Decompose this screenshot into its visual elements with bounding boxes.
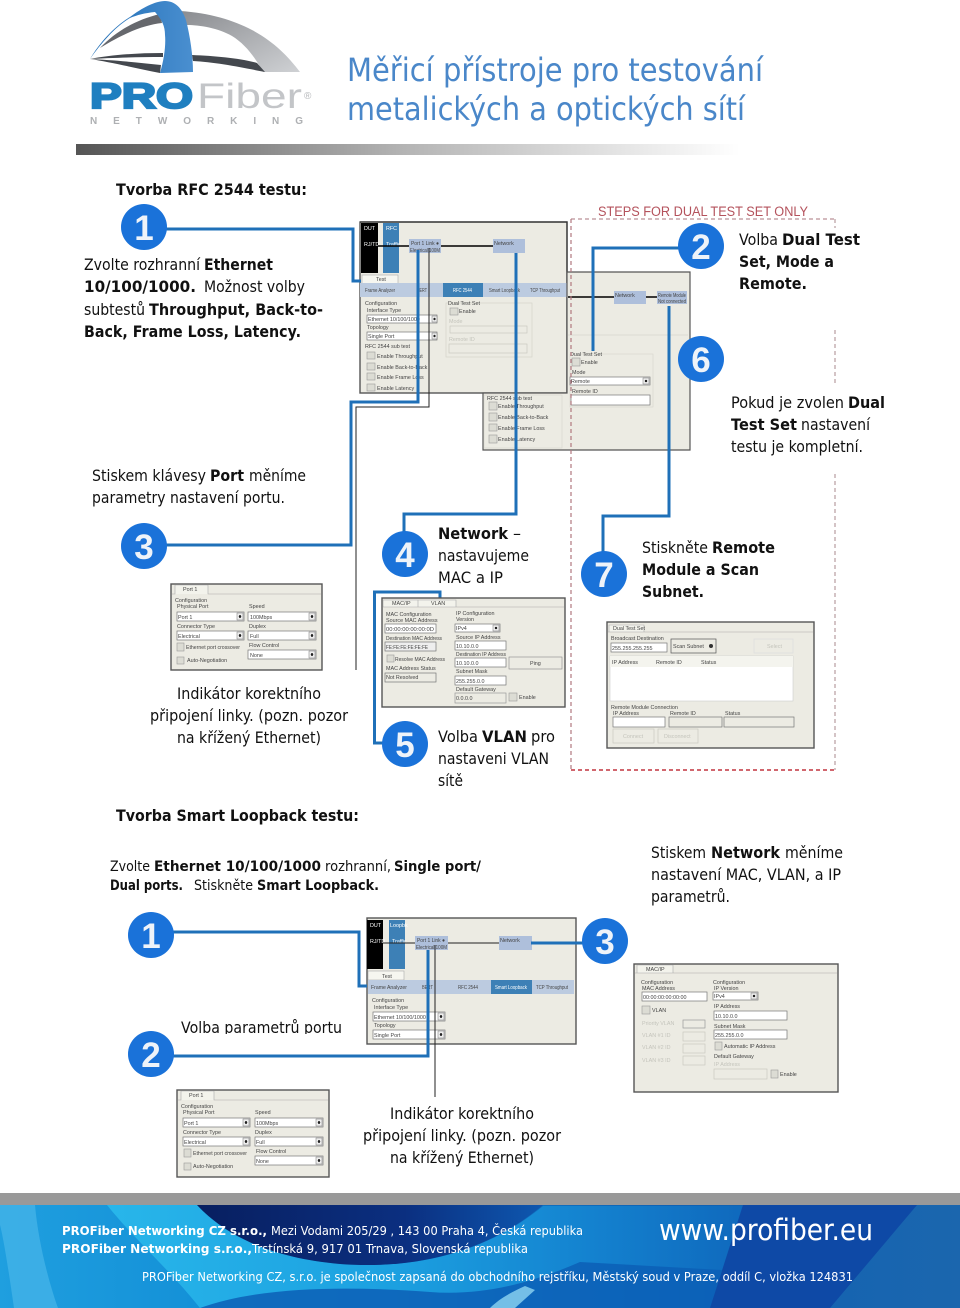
screenshot: dual test set window: Enable <box>581 360 598 366</box>
text: smart loopback instructions <box>110 859 482 894</box>
connector: smart loopback port indicator <box>434 945 436 1097</box>
screenshot: smart loopback window: Topology <box>374 1023 396 1029</box>
text: step 6 note <box>731 393 885 456</box>
screenshot: RFC 2544 main window: Enable Latency <box>377 386 414 392</box>
screenshot: dual test set window: Mode <box>572 370 586 376</box>
connector: smart loopback step 1 <box>172 932 367 986</box>
badge: 3 <box>121 523 167 569</box>
badge: 6 <box>678 336 724 382</box>
screenshot: smart loopback window: Traffic <box>392 939 407 945</box>
logo: PROFiber Networking <box>90 1 312 127</box>
screenshot: RFC 2544 main window: RFC <box>386 226 397 232</box>
screenshot: port settings (smart loopback): Port 1 <box>184 1121 198 1127</box>
screenshot: MAC/IP settings <box>382 598 565 707</box>
connector: step 4 <box>404 253 516 534</box>
screenshot: MAC/IP settings: VLAN <box>431 601 445 607</box>
connector: smart loopback step 2 <box>172 950 428 1056</box>
text: network key: nastavení MAC, VLAN, a IP <box>651 865 841 884</box>
text: step 1 instructions: subtestů <box>84 300 145 319</box>
screenshot: MAC/IP settings: Default Gateway <box>456 687 496 693</box>
screenshot: remote module scan <box>607 622 814 748</box>
text: step 2 instructions: Set, Mode a <box>739 252 834 271</box>
text: network key: parametrů. <box>651 887 730 906</box>
screenshot: network settings (smart loopback): IP Version <box>714 986 738 992</box>
screenshot: remote module scan: Status <box>725 711 741 717</box>
text: step 7 instructions: Subnet. <box>642 582 704 601</box>
screenshot: smart loopback window: RJ/TD <box>370 939 385 945</box>
badge: 5 <box>382 721 428 767</box>
text: step 2 instructions <box>739 230 860 293</box>
screenshot: port settings (smart loopback): Ethernet port crossover <box>193 1151 247 1157</box>
screenshot: dual test set window: Enable Throughput <box>498 404 544 410</box>
screenshot: MAC/IP settings: 0.0.0.0 <box>456 696 472 702</box>
text: port indicator note <box>150 684 348 747</box>
text: step 7 instructions: Module a Scan <box>642 560 759 579</box>
text: network step 4: MAC a IP <box>438 568 503 587</box>
screenshot: network settings (smart loopback): IP Address <box>714 1004 740 1010</box>
screenshot: RFC 2544 main window: Enable Back-to-Back <box>377 365 428 371</box>
screenshot: MAC/IP settings: Destination MAC Address <box>386 636 442 642</box>
text: step 6 note: Dual <box>848 393 885 412</box>
screenshot: RFC 2544 main window: Ethernet 10/100/1000 <box>368 317 420 323</box>
screenshot: RFC 2544 main window: Test <box>376 277 386 283</box>
footer: company addresses: PROFiber Networking CZ s.r.o., <box>62 1223 267 1238</box>
screenshot: smart loopback window <box>367 918 576 1044</box>
screenshot: port settings (RFC 2544): Configuration <box>175 598 207 604</box>
badge: loopback 3 <box>582 918 628 964</box>
connector: step 3 <box>165 250 418 545</box>
screenshot: MAC/IP settings: MAC/IP <box>392 601 411 607</box>
screenshot: smart loopback window: Interface Type <box>374 1005 408 1011</box>
text: step 1 instructions: Možnost volby <box>204 277 305 296</box>
screenshot: remote module scan: Select <box>767 644 782 650</box>
badge: 4: 4 <box>395 536 415 575</box>
screenshot: dual test set window: Remote ID <box>572 389 598 395</box>
screenshot: MAC/IP settings: 00:00:00:00:00:0D <box>386 627 434 633</box>
screenshot: dual test set window <box>483 272 690 450</box>
text: network key <box>651 843 843 906</box>
text: smart loopback port indicator note: na křížený Ethernet) <box>390 1148 534 1167</box>
text: smart loopback instructions: Ethernet 10/100/1000 <box>154 859 321 875</box>
text: network step 4 <box>438 524 529 587</box>
screenshot: MAC/IP settings: Ping <box>530 661 541 667</box>
screenshot: smart loopback window: Configuration <box>372 998 404 1004</box>
screenshot: remote module scan: Remote ID <box>656 660 682 666</box>
connector: step 2 <box>593 248 680 351</box>
screenshot: RFC 2544 main window: Enable Frame Loss <box>377 375 424 381</box>
screenshot: RFC 2544 main window: Traffic <box>386 242 401 248</box>
screenshot: port settings (RFC 2544): Duplex <box>249 624 266 630</box>
screenshot: RFC 2544 main window: Interface Type <box>367 308 401 314</box>
screenshot: network settings (smart loopback): Enable <box>780 1072 797 1078</box>
connector: step 1 <box>165 229 361 281</box>
screenshot: port settings (RFC 2544): Electrical <box>178 634 200 640</box>
screenshot: RFC 2544 main window: Dual Test Set <box>448 301 480 307</box>
screenshot: smart loopback window: RFC 2544 <box>458 985 478 991</box>
screenshot: port settings (smart loopback): Electrical <box>184 1140 206 1146</box>
screenshot: port settings (smart loopback): Flow Control <box>256 1149 286 1155</box>
badge: loopback 3: 3 <box>595 923 615 962</box>
screenshot: MAC/IP settings: Source IP Address <box>456 635 501 641</box>
connector: step 5 <box>374 592 440 743</box>
screenshot: MAC/IP settings: IP Configuration <box>456 611 495 617</box>
title <box>347 51 764 128</box>
screenshot: smart loopback window: BERT <box>422 985 434 991</box>
badge: 6: 6 <box>691 341 711 380</box>
screenshot: RFC 2544 main window <box>360 222 567 393</box>
text: step 1 instructions: Zvolte rozhranní <box>84 255 200 274</box>
logo: PROFiber Networking: Fiber <box>197 77 302 116</box>
screenshot: RFC 2544 main window: DUT <box>364 226 376 232</box>
text: network step 4: nastavujeme <box>438 546 529 565</box>
footer <box>0 1193 960 1308</box>
screenshot: MAC/IP settings: MAC Address Status <box>386 666 436 672</box>
screenshot: port settings (smart loopback): Configuration <box>181 1104 213 1110</box>
screenshot: port settings (RFC 2544): Flow Control <box>249 643 279 649</box>
badge: loopback 2: 2 <box>141 1036 161 1075</box>
screenshot: RFC 2544 main window: Enable <box>459 309 476 315</box>
text: smart loopback instructions: Dual ports. <box>110 878 183 894</box>
footer: website: www.profiber.eu <box>659 1213 873 1247</box>
text: step 1 instructions <box>84 255 323 341</box>
heading: smart loopback: Tvorba Smart Loopback testu: <box>116 806 359 825</box>
text: port key: Port <box>210 466 244 485</box>
connector: step 7 <box>603 306 669 554</box>
screenshot: dual test set window: Dual Test Set <box>570 352 602 358</box>
screenshot: smart loopback window: Network <box>500 938 520 944</box>
screenshot: MAC/IP settings: FE:FE:FE:FE:FE:FE <box>386 645 428 651</box>
text: step 7 instructions <box>642 538 775 601</box>
screenshot: dual test set window: Enable Latency <box>498 437 535 443</box>
screenshot: remote module scan: Broadcast Destination <box>611 636 664 642</box>
screenshot: network settings (smart loopback): IP Address <box>714 1062 740 1068</box>
badge: 4 <box>382 531 428 577</box>
text: network step 4: Network <box>438 524 508 543</box>
text: network key: Stiskem <box>651 843 706 862</box>
screenshot: network settings (smart loopback): VLAN #1 ID <box>642 1033 671 1039</box>
screenshot: RFC 2544 main window: Electrical 100M <box>410 248 440 254</box>
screenshot: MAC/IP settings: Version <box>456 617 474 623</box>
text: step 5 VLAN <box>438 727 555 790</box>
screenshot: MAC/IP settings: Resolve MAC Address <box>395 657 445 663</box>
screenshot: smart loopback window: TCP Throughput <box>536 985 568 991</box>
screenshot: port settings (RFC 2544): Port 1 <box>178 615 192 621</box>
logo: PROFiber Networking: NETWORKING <box>90 116 303 127</box>
screenshot: port settings (RFC 2544) <box>171 584 322 670</box>
screenshot: dual test set window: Enable Frame Loss <box>498 426 545 432</box>
screenshot: smart loopback window: Ethernet 10/100/1000 <box>374 1015 426 1021</box>
screenshot: remote module scan: Disconnect <box>664 734 691 740</box>
screenshot: network settings (smart loopback): Priority VLAN <box>642 1021 674 1027</box>
screenshot: smart loopback window: Single Port <box>374 1033 401 1039</box>
screenshot: dual test set window: Network <box>615 293 635 299</box>
footer: company addresses: PROFiber Networking s.r.o., <box>62 1241 252 1256</box>
screenshot: remote module scan: 255.255.255.255 <box>612 646 652 652</box>
screenshot: remote module scan: Remote ID <box>670 711 696 717</box>
screenshot: RFC 2544 main window: Port 1 Link ● <box>411 241 439 247</box>
screenshot: network settings (smart loopback): VLAN #2 ID <box>642 1045 671 1051</box>
badge: 2 <box>678 223 724 269</box>
screenshot: network settings (smart loopback): Automatic IP Address <box>724 1044 776 1050</box>
screenshot: port settings (RFC 2544): 100Mbps <box>250 615 272 621</box>
screenshot: MAC/IP settings: Enable <box>519 695 536 701</box>
text: port indicator note: Indikátor korektního <box>177 684 321 703</box>
text: port indicator note: připojení linky. (pozn. pozor <box>150 706 348 725</box>
footer: company addresses <box>62 1223 583 1256</box>
badge: 5: 5 <box>395 726 415 765</box>
screenshot: RFC 2544 main window: Enable Throughput <box>377 354 423 360</box>
screenshot: dual test set window: Remote <box>571 379 590 385</box>
text: step 7 instructions: Stiskněte <box>642 538 708 557</box>
screenshot: RFC 2544 main window: Configuration <box>365 301 397 307</box>
badge: 7: 7 <box>594 556 614 595</box>
text: port key: měníme <box>249 466 306 485</box>
screenshot: port settings (smart loopback): Physical Port <box>183 1110 215 1116</box>
screenshot: smart loopback window: Smart Loopback <box>495 985 527 991</box>
screenshot: MAC/IP settings: IPv4 <box>456 626 467 632</box>
screenshot: MAC/IP settings: Not Resolved <box>386 675 418 681</box>
screenshot: network settings (smart loopback): Configuration <box>641 980 673 986</box>
text: step 5 VLAN: VLAN <box>482 727 527 746</box>
text: step 7 instructions: Remote <box>712 538 775 557</box>
screenshot: port settings (smart loopback): Port 1 <box>189 1093 203 1099</box>
badge: 2: 2 <box>691 228 711 267</box>
title: Měřicí přístroje pro testování <box>347 51 764 89</box>
text: network key: měníme <box>785 843 843 862</box>
screenshot: MAC/IP settings: 10.10.0.0 <box>456 644 478 650</box>
screenshot: smart loopback window: Test <box>382 974 392 980</box>
badge: 3: 3 <box>134 528 154 567</box>
footer: company addresses: Mezi Vodami 205/29 , 143 00 Praha 4, Česká republika <box>271 1223 583 1238</box>
screenshot: network settings (smart loopback): IPv4 <box>714 994 725 1000</box>
text: smart loopback port indicator note: připojení linky. (pozn. pozor <box>363 1126 561 1145</box>
text: step 1 instructions: Throughput, Back-to- <box>149 300 323 319</box>
screenshot: RFC 2544 main window: RFC 2544 <box>453 288 472 294</box>
screenshot: smart loopback window: Frame Analyzer <box>371 985 407 991</box>
screenshot: network settings (smart loopback): VLAN <box>652 1008 666 1014</box>
text: step 5 VLAN: Volba <box>438 727 478 746</box>
badge: 1 <box>121 204 167 250</box>
screenshot: network settings (smart loopback): 255.255.0.0 <box>715 1033 743 1039</box>
screenshot: MAC/IP settings: MAC Configuration <box>386 612 432 618</box>
text: smart loopback port indicator note <box>363 1104 561 1167</box>
screenshot: port settings (smart loopback): 100Mbps <box>256 1121 278 1127</box>
text: step 1 instructions: Back, Frame Loss, Latency. <box>84 322 301 341</box>
badge: 7 <box>581 551 627 597</box>
text: smart loopback instructions: rozhranní, <box>325 859 391 875</box>
screenshot: port settings (smart loopback): None <box>256 1159 269 1165</box>
heading: steps for dual test set only: STEPS FOR DUAL TEST SET ONLY <box>598 204 808 219</box>
screenshot: remote module scan: Status <box>701 660 717 666</box>
screenshot: MAC/IP settings: Subnet Mask <box>456 669 488 675</box>
screenshot: MAC/IP settings: Source MAC Address <box>386 618 438 624</box>
screenshot: MAC/IP settings: 10.10.0.0 <box>456 661 478 667</box>
screenshot: dual test set window: RFC 2544 sub test <box>487 396 532 402</box>
screenshot: RFC 2544 main window: Topology <box>367 325 389 331</box>
text: smart loopback port indicator note: Indikátor korektního <box>390 1104 534 1123</box>
screenshot: RFC 2544 main window: Remote ID <box>449 337 475 343</box>
connector: port indicator <box>356 248 429 670</box>
screenshot: RFC 2544 main window: Mode <box>449 319 462 325</box>
screenshot: dual test set window: Remote Module <box>658 293 686 299</box>
text: smart loopback instructions: Smart Loopback. <box>257 878 379 894</box>
text: step 2 instructions: Volba <box>739 230 778 249</box>
screenshot: port settings (smart loopback) <box>177 1090 329 1177</box>
screenshot: RFC 2544 main window: BERT <box>417 288 427 294</box>
screenshot: RFC 2544 main window: RJ/TD <box>364 242 379 248</box>
screenshot: RFC 2544 main window: Single Port <box>368 334 395 340</box>
text: port parameters: Volba parametrů portu <box>181 1018 342 1037</box>
text: network step 4: – <box>513 524 521 543</box>
screenshot: smart loopback window: Port 1 Link ● <box>417 938 445 944</box>
screenshot: smart loopback window: Electrical 100M <box>416 945 447 951</box>
screenshot: network settings (smart loopback): Configuration <box>713 980 745 986</box>
screenshot: network settings (smart loopback): MAC Address <box>642 986 675 992</box>
screenshot: remote module scan: Remote Module Connection <box>611 705 678 711</box>
screenshot: dual test set window: Enable Back-to-Back <box>498 415 549 421</box>
screenshot: network settings (smart loopback): 10.10.0.0 <box>715 1014 737 1020</box>
screenshot: port settings (smart loopback): Full <box>256 1140 265 1146</box>
screenshot: port settings (RFC 2544): Auto-Negotiation <box>187 658 227 664</box>
badge: loopback 1 <box>128 912 174 958</box>
screenshot: RFC 2544 main window: Frame Analyzer <box>365 288 395 294</box>
dashed frame: steps for dual test set <box>571 219 835 770</box>
logo: PROFiber Networking: PRO <box>90 77 193 116</box>
heading: RFC 2544: Tvorba RFC 2544 testu: <box>116 180 307 199</box>
text: step 2 instructions: Dual Test <box>782 230 860 249</box>
text: step 2 instructions: Remote. <box>739 274 807 293</box>
screenshot: RFC 2544 main window: RFC 2544 sub test <box>365 344 410 350</box>
screenshot: port settings (smart loopback): Speed <box>255 1110 271 1116</box>
screenshot: network settings (smart loopback): 00:00:00:00:00:00 <box>643 995 686 1001</box>
screenshot: RFC 2544 main window: Smart Loopback <box>489 288 520 294</box>
screenshot: port settings (RFC 2544): None <box>250 653 263 659</box>
text: network key: Network <box>711 843 780 862</box>
text: smart loopback instructions: Zvolte <box>110 859 150 875</box>
text: step 5 VLAN: pro <box>531 727 555 746</box>
text: port key: Stiskem klávesy <box>92 466 206 485</box>
screenshot: network settings (smart loopback): Subnet Mask <box>714 1024 746 1030</box>
screenshot: smart loopback window: DUT <box>370 923 382 929</box>
text: port key: parametry nastavení portu. <box>92 488 285 507</box>
screenshot: RFC 2544 main window: Network <box>494 241 514 247</box>
screenshot: MAC/IP settings: 255.255.0.0 <box>456 679 484 685</box>
text: step 6 note: nastavení <box>801 415 870 434</box>
text: step 1 instructions: 10/100/1000. <box>84 277 196 296</box>
badge: loopback 2 <box>128 1031 174 1077</box>
text: step 5 VLAN: sítě <box>438 771 463 790</box>
screenshot: remote module scan: Connect <box>623 734 644 740</box>
screenshot: remote module scan: IP Address <box>612 660 638 666</box>
text: step 6 note: testu je kompletní. <box>731 437 863 456</box>
screenshot: dual test set window: Not connected <box>658 299 686 305</box>
screenshot: MAC/IP settings: Destination IP Address <box>456 652 506 658</box>
text: step 6 note: Pokud je zvolen <box>731 393 844 412</box>
screenshot: remote module scan: Dual Test Set <box>613 626 645 632</box>
screenshot: port settings (smart loopback): Auto-Negotiation <box>193 1164 233 1170</box>
screenshot: smart loopback window: Loopbk <box>390 923 408 929</box>
text: port indicator note: na křížený Ethernet) <box>177 728 321 747</box>
header gradient bar <box>76 144 740 155</box>
title: metalických a optických sítí <box>347 90 746 128</box>
screenshot: port settings (RFC 2544): Physical Port <box>177 604 209 610</box>
screenshot: network settings (smart loopback): VLAN #3 ID <box>642 1058 671 1064</box>
footer: company addresses: Trstínská 9, 917 01 Trnava, Slovenská republika <box>251 1241 528 1256</box>
badge: loopback 1: 1 <box>141 917 161 956</box>
screenshot: port settings (RFC 2544): Full <box>250 634 259 640</box>
connector: smart loopback step 3 <box>531 942 584 944</box>
screenshot: port settings (RFC 2544): Connector Type <box>177 624 215 630</box>
text: step 1 instructions: Ethernet <box>204 255 273 274</box>
text: step 6 note: Test Set <box>731 415 797 434</box>
footer: registration note: PROFiber Networking CZ, s.r.o. je společnost zapsaná do obchodního rejstříku, Městský soud v Praze, oddíl C, vložka 124831 <box>142 1269 853 1284</box>
screenshot: network settings (smart loopback): MAC/IP <box>646 967 665 973</box>
screenshot: port settings (RFC 2544): Speed <box>249 604 265 610</box>
screenshot: port settings (RFC 2544): Port 1 <box>183 587 197 593</box>
logo: PROFiber Networking: ® <box>304 91 312 102</box>
text: step 5 VLAN: nastaveni VLAN <box>438 749 549 768</box>
screenshot: port settings (smart loopback): Duplex <box>255 1130 272 1136</box>
screenshot: network settings (smart loopback) <box>634 964 838 1092</box>
text: smart loopback instructions: Stiskněte <box>194 878 253 894</box>
screenshot: remote module scan: IP Address <box>613 711 639 717</box>
text: smart loopback instructions: Single port/ <box>394 859 482 875</box>
text: port key <box>92 466 306 507</box>
badge: 1: 1 <box>134 209 154 248</box>
screenshot: remote module scan: Scan Subnet <box>673 644 704 650</box>
screenshot: network settings (smart loopback): Default Gateway <box>714 1054 754 1060</box>
screenshot: port settings (smart loopback): Connector Type <box>183 1130 221 1136</box>
screenshot: RFC 2544 main window: TCP Throughput <box>530 288 560 294</box>
screenshot: port settings (RFC 2544): Ethernet port crossover <box>186 645 240 651</box>
